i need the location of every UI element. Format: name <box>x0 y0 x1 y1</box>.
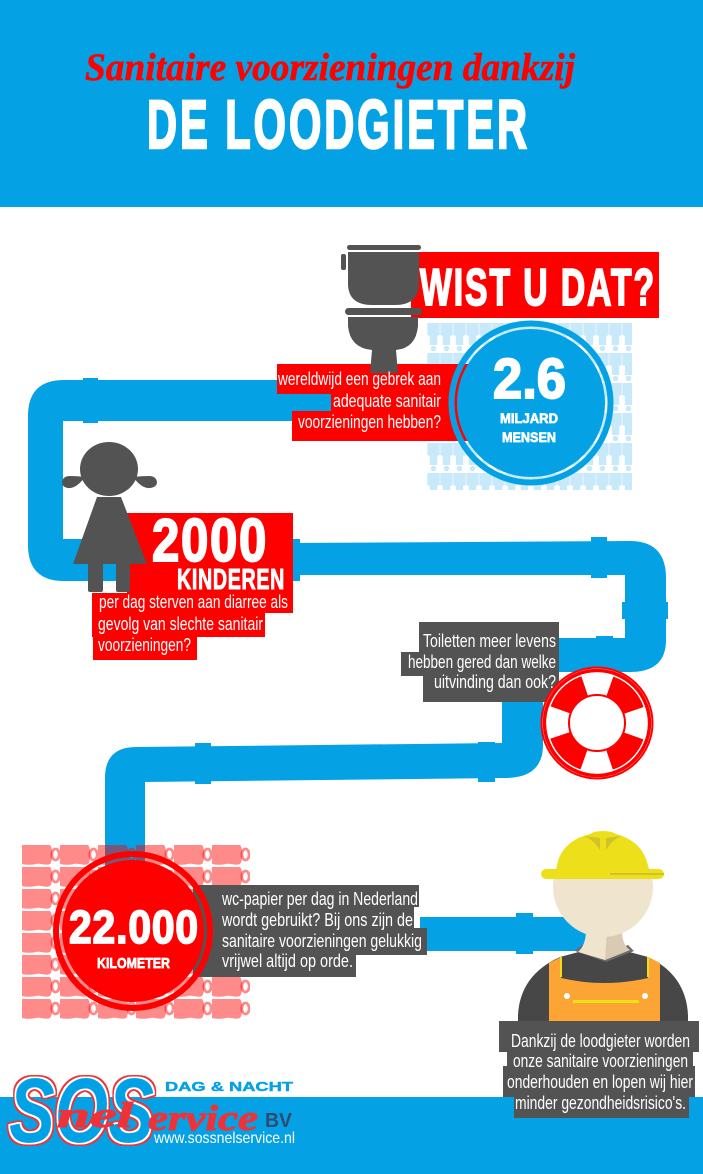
stat: 2000 kinderen: 2000 <box>152 507 268 574</box>
stat circle: 2.6 miljard mensen <box>452 324 610 482</box>
grey box: wc-papier: wc-papier per dag in Nederland <box>221 889 418 909</box>
text: wereldwijd gebrek: adequate sanitair <box>333 391 441 411</box>
red box: 2000 kinderen <box>92 513 293 660</box>
stat circle: 22.000 kilometer: KILOMETER <box>97 955 170 972</box>
blue water pipe <box>28 378 668 954</box>
plumber hat <box>556 831 649 872</box>
text: wereldwijd gebrek: voorzieningen hebben? <box>298 412 441 432</box>
grey box: wc-papier: vrijwel altijd op orde. <box>222 951 353 971</box>
grey box: toiletten <box>401 622 559 702</box>
grey box: toiletten: hebben gered dan welke <box>408 652 556 672</box>
stat circle: 22.000 kilometer: 22.000 <box>69 901 199 953</box>
icon: life ring <box>542 668 652 778</box>
logo url: www.sossnelservice.nl <box>153 1130 295 1147</box>
logo: SOS Snel Service <box>9 1060 295 1162</box>
icon: girl <box>62 442 157 592</box>
logo bv: BV <box>265 1110 293 1132</box>
text: wereldwijd gebrek <box>277 369 441 432</box>
header band <box>0 0 703 207</box>
grey box: toiletten: uitvinding dan ook? <box>434 672 556 692</box>
icon: toilet <box>341 245 422 373</box>
red box: wereldwijd <box>277 364 475 441</box>
plumber body <box>518 950 688 1022</box>
footer band <box>0 1097 703 1174</box>
text: wereldwijd gebrek: wereldwijd een gebrek aan <box>277 369 441 389</box>
icon: plumber <box>518 831 688 1022</box>
title script line: Sanitaire voorzieningen dankzij <box>85 46 575 89</box>
stat circle: 2.6 miljard mensen: MENSEN <box>502 429 556 445</box>
plumber head <box>553 837 653 937</box>
stat: 2000 kinderen: KINDEREN <box>177 564 285 596</box>
pictogram: people grid <box>427 321 632 490</box>
grey box: wc-papier: wordt gebruikt? Bij ons zijn de <box>221 910 413 930</box>
stat circle: 2.6 miljard mensen: 2.6 <box>493 347 566 411</box>
title <box>85 46 575 163</box>
pictogram: toilet paper grid <box>22 845 250 1021</box>
stat circle: 2.6 miljard mensen: MILJARD <box>500 410 558 426</box>
text: per dag sterven <box>98 592 288 655</box>
logo snel: nel <box>57 1095 133 1135</box>
plumber overalls <box>549 957 660 1022</box>
grey box: wc-papier: sanitaire voorzieningen gelukkig <box>222 931 422 951</box>
stat circle: 22.000 kilometer <box>56 854 210 1008</box>
text: per dag sterven: gevolg van slechte sanitair <box>98 614 263 634</box>
grey box: wc-papier <box>193 885 427 977</box>
plumber neck and collar <box>575 945 634 962</box>
grey box: toiletten: Toiletten meer levens <box>423 631 556 651</box>
logo service: ervice <box>148 1098 258 1138</box>
grey box: dankzij de loodgieter <box>499 1021 699 1118</box>
logo dag en nacht: DAG & NACHT <box>165 1079 293 1094</box>
text: per dag sterven: per dag sterven aan diarree als <box>99 592 288 612</box>
logo SOS letters: SOS <box>9 1060 154 1162</box>
text: per dag sterven: voorzieningen? <box>98 635 191 655</box>
